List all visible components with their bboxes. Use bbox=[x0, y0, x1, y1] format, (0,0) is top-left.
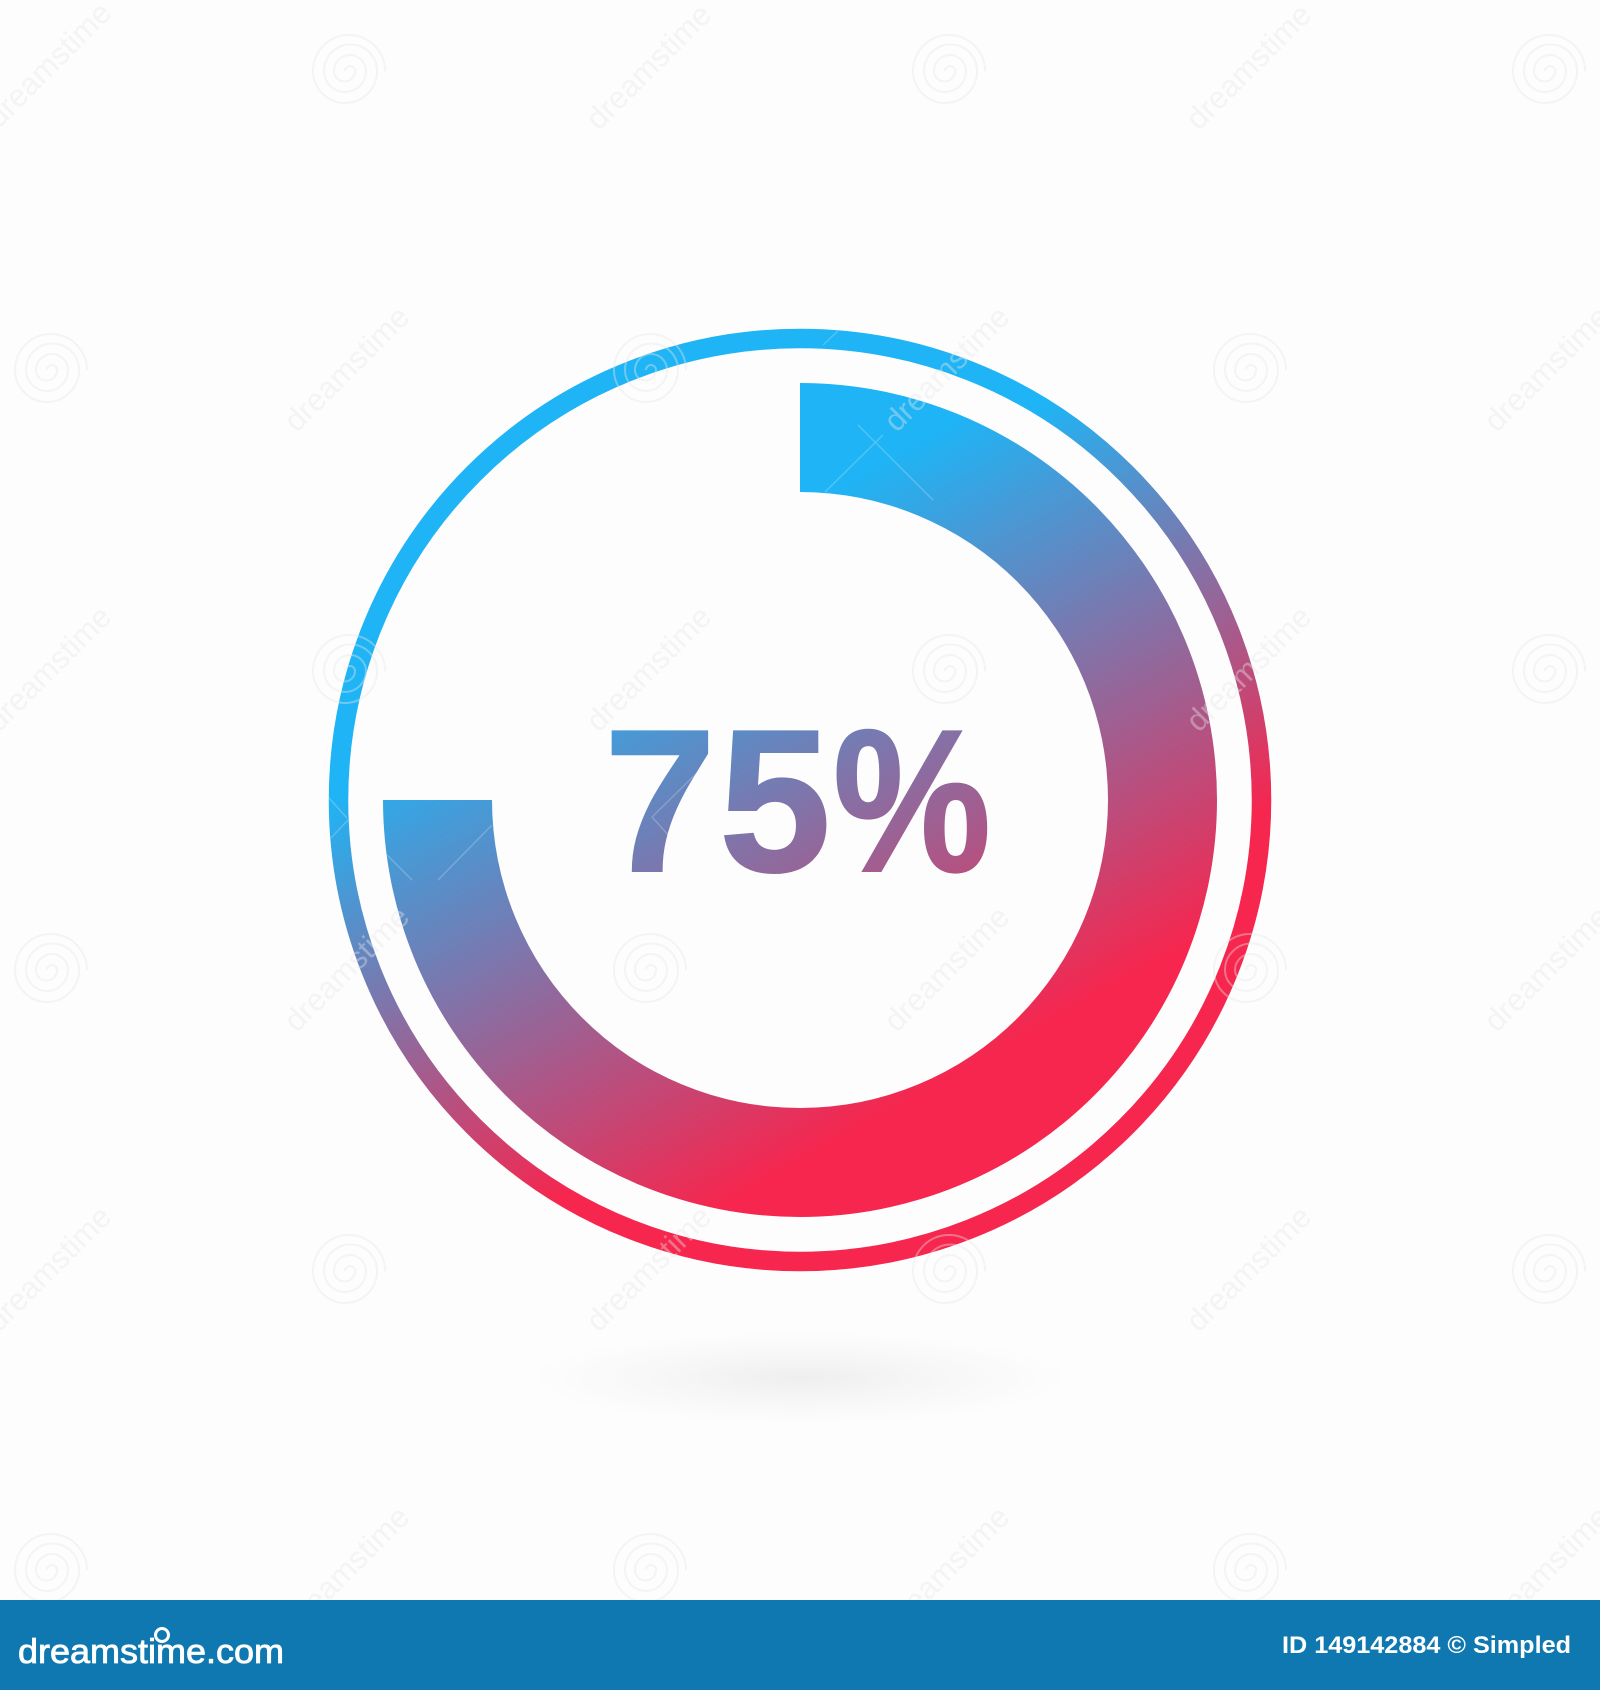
watermark text: dreamstime bbox=[579, 1199, 718, 1338]
watermark text: dreamstime bbox=[277, 299, 416, 438]
watermark text: dreamstime bbox=[1179, 599, 1318, 738]
footer bar bbox=[0, 1600, 1600, 1690]
percentage label: 75%: 7 bbox=[604, 688, 716, 915]
footer logo: dreamstime.com: dreamstime.com bbox=[18, 1633, 284, 1671]
icon: logo spiral bbox=[156, 1628, 168, 1642]
percentage label: 75%: 5 bbox=[719, 688, 831, 915]
ground shadow bbox=[530, 1332, 1070, 1424]
percentage label: 75% bbox=[604, 688, 991, 915]
watermark text: dreamstime bbox=[277, 1499, 416, 1638]
watermark text: dreamstime bbox=[1179, 0, 1318, 136]
watermark text: dreamstime bbox=[277, 899, 416, 1038]
footer credit: ID 149142884 © Simpled bbox=[1282, 1632, 1571, 1659]
watermark text: dreamstime bbox=[877, 899, 1016, 1038]
outer thin ring bbox=[338, 338, 1262, 1262]
watermark text: dreamstime bbox=[579, 599, 718, 738]
watermark text: dreamstime bbox=[877, 1499, 1016, 1638]
percentage label: 75%: % bbox=[833, 688, 991, 915]
75% progress arc bbox=[383, 383, 1217, 1217]
watermark text: dreamstime bbox=[579, 0, 718, 136]
watermark text: dreamstime bbox=[877, 299, 1016, 438]
watermark text: dreamstime bbox=[1179, 1199, 1318, 1338]
